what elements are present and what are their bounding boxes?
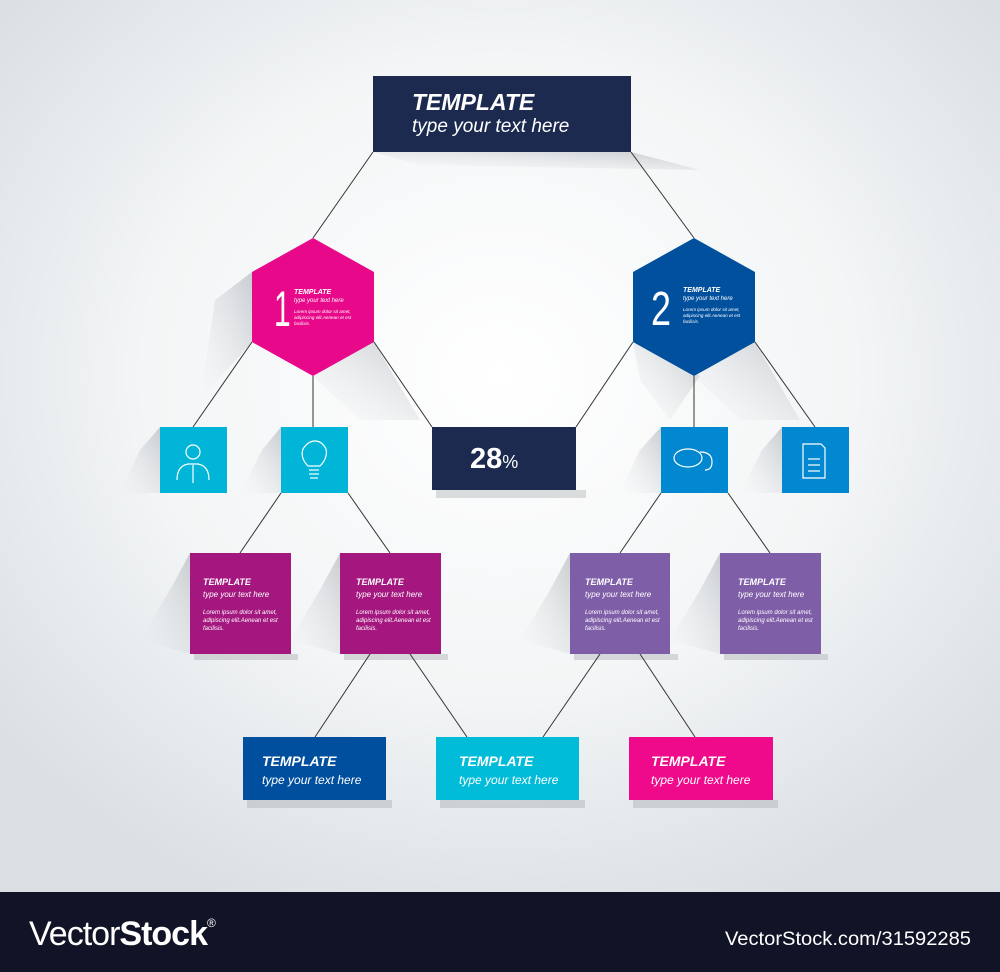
hexagon 1: type your text here [294, 298, 344, 304]
hexagon 2 [633, 238, 755, 376]
purple box 1: Lorem ipsum dolor sit amet, [203, 610, 277, 616]
hexagon 1: Lorem ipsum dolor sit amet, [294, 309, 351, 314]
percentage box [432, 427, 576, 490]
violet box 3 [570, 553, 670, 654]
hexagon 1: adipiscing elit.Aenean et est [294, 315, 352, 320]
footer bar [0, 892, 1000, 972]
hexagon 2: Lorem ipsum dolor sit amet, [683, 307, 740, 312]
icon box: bulb [281, 427, 348, 493]
violet box 4: TEMPLATE [738, 577, 787, 587]
purple box 2 [340, 553, 441, 654]
bottom box 1: type your text here [262, 773, 362, 787]
title box [373, 76, 631, 152]
violet box 4: type your text here [738, 590, 805, 599]
icon box: person [160, 427, 227, 493]
purple box 2: adipiscing elit.Aenean et est [356, 618, 431, 624]
violet box 3: adipiscing elit.Aenean et est [585, 618, 660, 624]
hexagon 2: adipiscing elit.Aenean et est [683, 313, 741, 318]
shadows [120, 152, 800, 654]
purple box 1: facilisis. [203, 626, 224, 632]
hexagon 1: 1 [274, 281, 291, 337]
bottom box 1: TEMPLATE [262, 753, 337, 769]
percentage box: 28% [470, 443, 518, 475]
footer bar: ® [207, 916, 216, 930]
violet box 3: TEMPLATE [585, 577, 634, 587]
purple box 1 [190, 553, 291, 654]
violet box 4: Lorem ipsum dolor sit amet, [738, 610, 812, 616]
purple box 2: TEMPLATE [356, 577, 405, 587]
bottom box 3 [629, 737, 773, 800]
purple box 1: type your text here [203, 590, 270, 599]
connector lines [193, 152, 815, 737]
hexagon 2: TEMPLATE [683, 287, 721, 294]
violet box 4 [720, 553, 821, 654]
bottom box 2: TEMPLATE [459, 753, 534, 769]
purple box 2: type your text here [356, 590, 423, 599]
hexagon 2: facilisis. [683, 319, 699, 324]
bottom box 2 [436, 737, 579, 800]
title box: TEMPLATE [412, 89, 535, 115]
violet box 3: Lorem ipsum dolor sit amet, [585, 610, 659, 616]
bottom box 3: TEMPLATE [651, 753, 726, 769]
footer bar: VectorStock [29, 915, 207, 953]
purple box 2: Lorem ipsum dolor sit amet, [356, 610, 430, 616]
bottom box 1 [243, 737, 386, 800]
violet box 4: facilisis. [738, 626, 759, 632]
icon box: chat [661, 427, 728, 493]
purple box 1: adipiscing elit.Aenean et est [203, 618, 278, 624]
purple box 1: TEMPLATE [203, 577, 252, 587]
title box: type your text here [412, 116, 569, 137]
bottom box 2: type your text here [459, 773, 559, 787]
purple box 2: facilisis. [356, 626, 377, 632]
hexagon 1: facilisis. [294, 321, 310, 326]
hexagon 2: 2 [651, 282, 671, 335]
bottom box 3: type your text here [651, 773, 751, 787]
hexagon 1 [252, 238, 374, 376]
hexagon 2: type your text here [683, 296, 733, 302]
hexagon 1: TEMPLATE [294, 289, 332, 296]
violet box 4: adipiscing elit.Aenean et est [738, 618, 813, 624]
icon box: document [782, 427, 849, 493]
violet box 3: facilisis. [585, 626, 606, 632]
footer bar: VectorStock.com/31592285 [725, 929, 971, 950]
violet box 3: type your text here [585, 590, 652, 599]
